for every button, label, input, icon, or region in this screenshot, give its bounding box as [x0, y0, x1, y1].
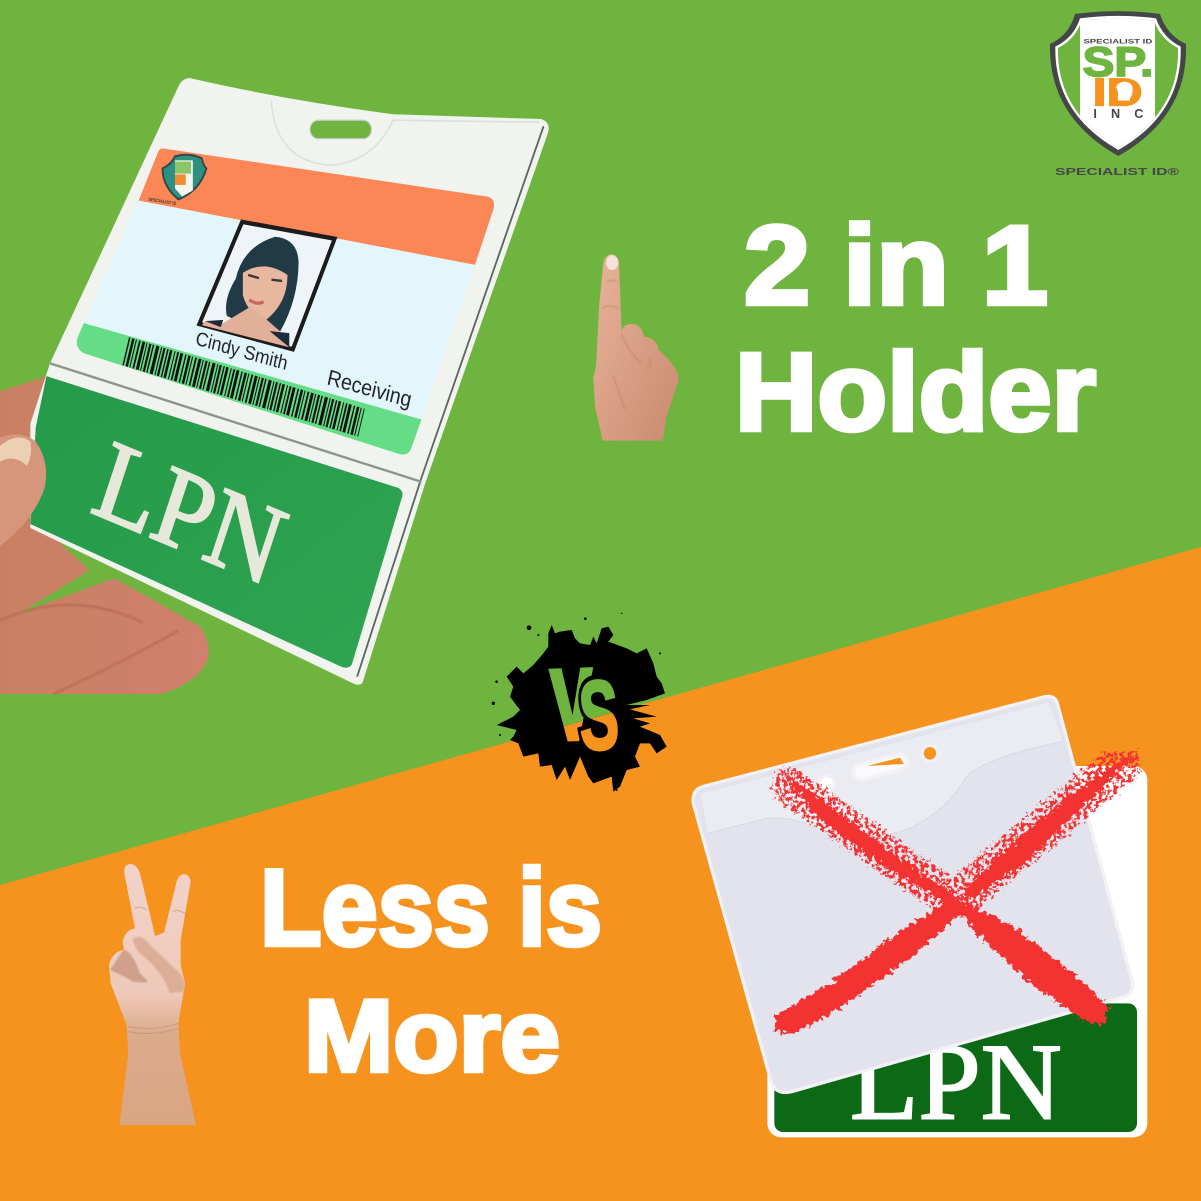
red cross-out mark — [775, 748, 1140, 1035]
card logo caption: SPECIALIST ID — [148, 196, 177, 206]
VS letters: S — [576, 661, 621, 772]
cardholder name: Cindy Smith — [194, 327, 290, 374]
hand — [0, 376, 209, 694]
logo head icon — [1116, 82, 1133, 101]
black paint splat — [492, 613, 667, 792]
heading line: Less is: Less is — [260, 847, 602, 969]
comparison: plain holder with separate badge — [693, 696, 1147, 1143]
id card — [77, 148, 494, 455]
VS letters: V — [550, 650, 594, 761]
logo INC: INC — [1093, 107, 1143, 121]
heading line: More: More — [304, 979, 560, 1093]
VS letters: S — [576, 661, 621, 772]
vs badge — [492, 613, 667, 792]
background: orange diagonal panel — [0, 547, 1201, 1201]
heading line: Holder: Holder — [735, 331, 1096, 454]
holder hole right — [922, 745, 938, 761]
plain clear holder — [693, 696, 1133, 1092]
VS letters — [548, 667, 618, 752]
shield — [1050, 11, 1186, 156]
LPN badge text: LPN — [81, 417, 299, 610]
heading line: 2 in 1: 2 in 1 — [744, 203, 1048, 328]
VS letters: V — [550, 650, 594, 761]
icon: pointing one finger hand — [593, 254, 679, 441]
icon: peace sign two fingers hand — [109, 864, 196, 1125]
logo small caption: SPECIALIST ID — [1083, 40, 1153, 46]
thumb over badge — [0, 434, 46, 546]
separate LPN badge — [767, 766, 1147, 1143]
thumbnail — [0, 437, 31, 466]
logo: Specialist ID shield — [1050, 11, 1186, 178]
photo: hand holding 2-in-1 badge holder — [0, 78, 549, 694]
card logo shield — [163, 155, 206, 199]
portrait photo — [199, 222, 335, 349]
logo ID: ID — [1093, 70, 1143, 114]
clear vinyl holder — [30, 78, 549, 685]
holder slot — [852, 752, 909, 781]
barcode — [126, 351, 361, 423]
department: Receiving — [325, 366, 414, 412]
logo wordmark: SPECIALIST ID® — [1055, 167, 1180, 178]
VS letters: S — [576, 661, 621, 772]
holder hole left — [819, 775, 835, 791]
logo SP: SP. — [1083, 38, 1153, 85]
heading: Less is More — [260, 847, 602, 1093]
lanyard slot — [310, 120, 371, 139]
LPN badge text: LPN — [850, 1022, 1062, 1143]
heading: 2 in 1 Holder — [735, 203, 1096, 454]
green LPN role badge — [30, 376, 403, 668]
